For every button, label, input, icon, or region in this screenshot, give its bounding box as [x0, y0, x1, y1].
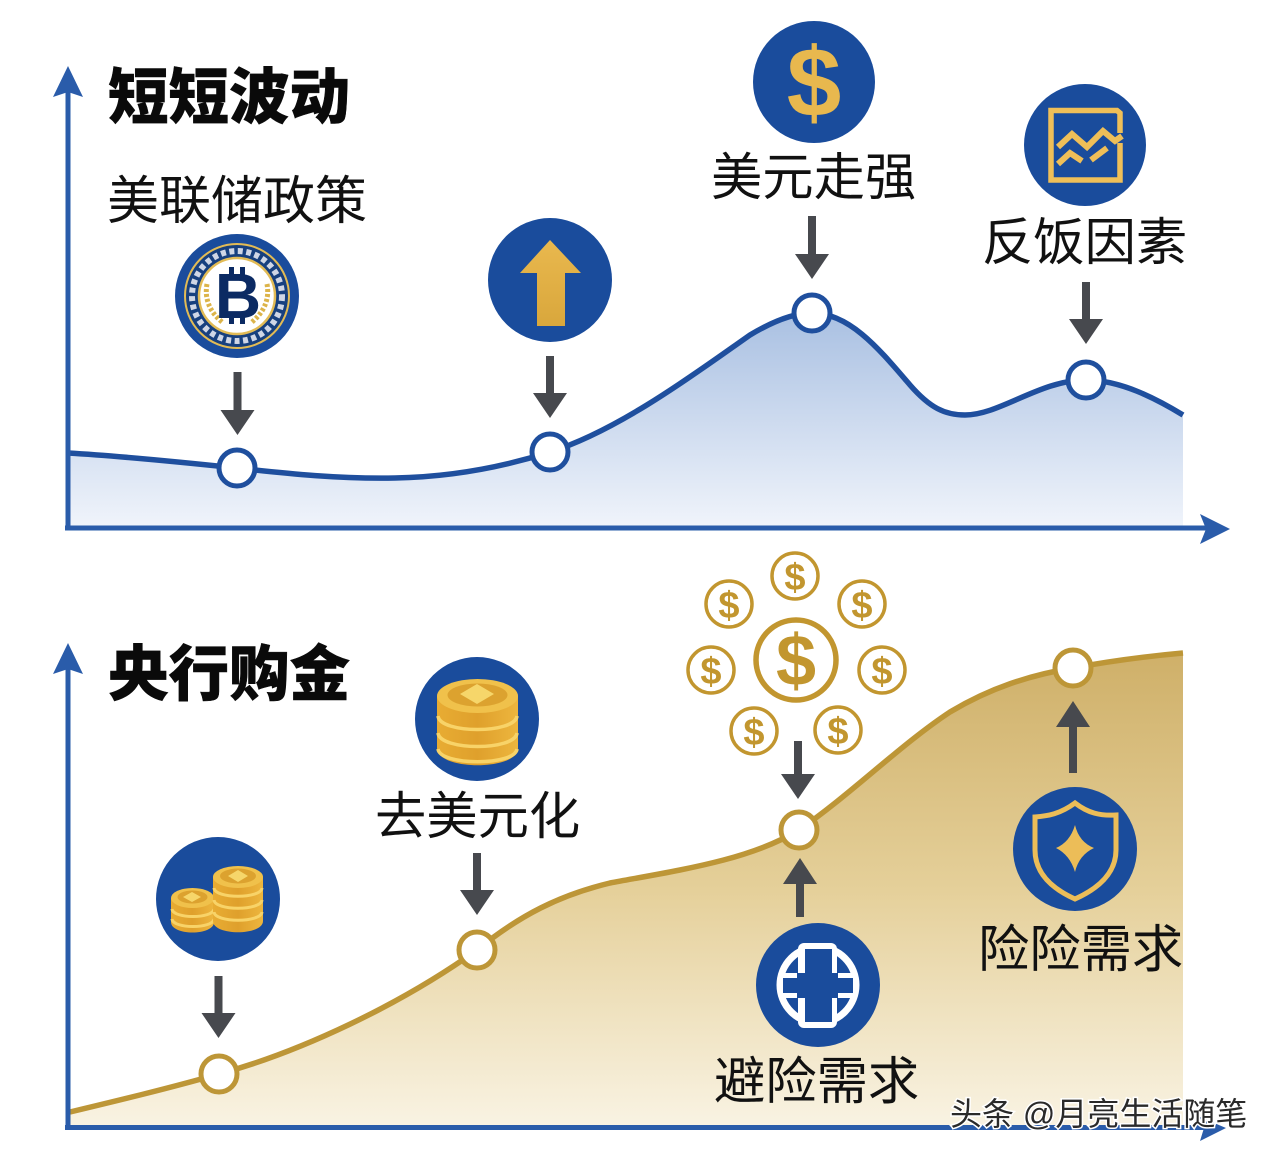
icon: up arrow — [488, 218, 612, 342]
icon: dollar coin cluster: $ — [784, 557, 806, 599]
icon: bitcoin medal — [175, 234, 299, 358]
icon: dollar: $ — [787, 27, 841, 137]
icon: bitcoin medal: B — [215, 260, 261, 332]
area and line: gold curve — [70, 653, 1183, 1127]
title: 央行购金 — [108, 640, 350, 708]
arrow — [795, 216, 829, 279]
icon: chart — [1024, 84, 1146, 206]
label: rebound factors: 反饭因素 — [982, 214, 1187, 271]
marker — [219, 450, 255, 486]
marker — [794, 295, 830, 331]
label: safe-haven demand: 险险需求 — [978, 921, 1183, 978]
icon: dollar coin cluster: $ — [700, 651, 722, 693]
label: Fed policy: 美联储政策 — [107, 173, 367, 231]
panel: short-term volatility chart — [53, 21, 1230, 544]
icon: dollar coin cluster: $ — [851, 585, 873, 627]
arrow — [220, 372, 254, 435]
label: safe-haven demand: 避险需求 — [714, 1053, 919, 1110]
label: strong dollar: 美元走强 — [711, 149, 916, 206]
icon: dollar coin cluster: $ — [871, 651, 893, 693]
marker — [1068, 362, 1104, 398]
label: de-dollarization: 去美元化 — [375, 788, 580, 845]
icon: shield — [1013, 787, 1137, 911]
icon: cross emblem — [756, 923, 880, 1047]
area and line: volatility curve — [68, 313, 1183, 527]
panel: central bank gold purchases chart — [53, 553, 1226, 1141]
icon: dollar — [753, 21, 875, 143]
title: 短短波动 — [108, 63, 350, 131]
arrow — [202, 976, 236, 1038]
arrow — [781, 741, 815, 799]
arrow — [1069, 282, 1103, 344]
arrow — [533, 356, 567, 418]
icon: dollar coin cluster: $ — [743, 712, 765, 754]
marker — [201, 1056, 237, 1092]
arrow — [1056, 701, 1090, 773]
axes — [53, 643, 1226, 1141]
icon: dollar coin cluster: $ — [718, 585, 740, 627]
marker — [459, 932, 495, 968]
icon: dollar coin cluster: $ — [776, 621, 816, 701]
icon: two coin stacks — [156, 837, 280, 961]
marker — [1055, 650, 1091, 686]
marker — [532, 434, 568, 470]
icon: coin stack — [415, 657, 539, 781]
arrow — [460, 853, 494, 915]
arrow — [783, 858, 817, 917]
axes — [53, 66, 1230, 544]
watermark: 头条 @月亮生活随笔 — [950, 1096, 1247, 1132]
marker — [781, 812, 817, 848]
icon: dollar coin cluster — [688, 553, 905, 754]
icon: dollar coin cluster: $ — [827, 711, 849, 753]
